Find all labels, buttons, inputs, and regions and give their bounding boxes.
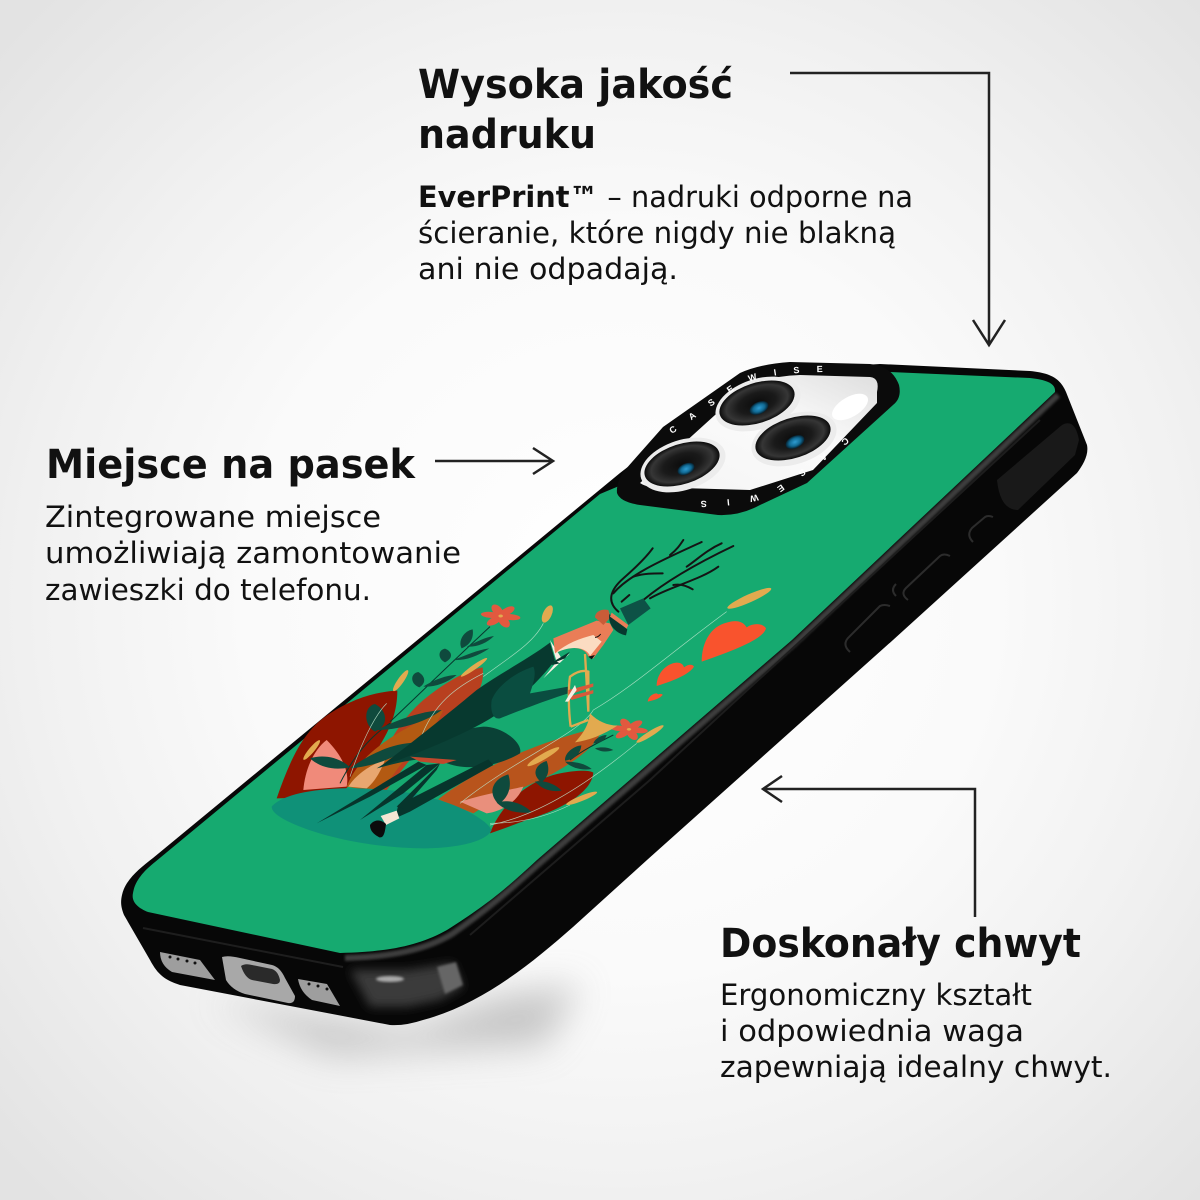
- side groove line: [470, 420, 1040, 935]
- ground ellipse: [272, 788, 492, 848]
- flower top: [475, 600, 526, 632]
- shirt collar: [543, 640, 570, 678]
- callout: grip: [720, 921, 1112, 1084]
- arrow: grip: [763, 776, 975, 917]
- body text: strap slot: [45, 500, 461, 607]
- green back surface: [133, 372, 1055, 953]
- body text: print quality: ścieranie, które nigdy nie blakną: [418, 216, 896, 250]
- wheat heads: [301, 585, 773, 807]
- bottom right speaker: [298, 979, 340, 1006]
- side edge highlight: [345, 395, 1058, 958]
- arrow: print quality: [790, 73, 1005, 345]
- right leaves: [438, 727, 603, 833]
- deer legs: [317, 759, 493, 823]
- body text: grip: [720, 978, 1112, 1084]
- heading: strap slot: Miejsce na pasek: [46, 442, 416, 488]
- body text: print quality: ani nie odpadają.: [418, 252, 678, 286]
- heading: print quality: Wysoka jakość: [418, 62, 733, 108]
- deer red undercoat: [410, 757, 457, 764]
- ring text bottom: CASEWISE: [701, 438, 848, 508]
- shoe and sock: [370, 811, 399, 837]
- ring text top: CASEWISE: [670, 366, 822, 433]
- trumpet: [568, 654, 617, 742]
- body text: strap slot: zawieszki do telefonu.: [45, 573, 371, 607]
- side buttons: [845, 516, 993, 652]
- callout: strap slot: [45, 442, 461, 607]
- hand cuff: [565, 685, 577, 702]
- wind lines: [350, 612, 727, 825]
- body text: grip: i odpowiednia waga: [720, 1014, 1024, 1048]
- hearts: [648, 621, 766, 702]
- phone case: [121, 362, 1088, 1026]
- heading: grip: Doskonały chwyt: [720, 921, 1081, 967]
- deer head: [553, 610, 613, 659]
- left red leaf: [277, 691, 397, 798]
- charging port: [222, 956, 295, 1003]
- side grip highlight: [997, 423, 1079, 510]
- body text: print quality: [418, 180, 913, 286]
- camera glass: [640, 375, 878, 490]
- left orange leaf: [347, 667, 483, 792]
- flash: [828, 388, 872, 426]
- body text: grip: Ergonomiczny kształt: [720, 978, 1032, 1012]
- callout: print quality: [418, 62, 913, 286]
- body text: grip: zapewniają idealny chwyt.: [720, 1050, 1112, 1084]
- deer jacket: [380, 643, 555, 767]
- arrow: strap slot: [435, 448, 553, 474]
- lens right: [744, 402, 844, 476]
- top hat: [609, 598, 651, 635]
- lens left: [633, 428, 733, 502]
- plant stems and leaves: [310, 627, 613, 813]
- bottom groove line: [143, 928, 343, 967]
- jacket sleeve: [491, 667, 568, 719]
- bow tie: [552, 652, 570, 665]
- deer trousers: [377, 727, 520, 768]
- illustration: deer with trumpet: [272, 540, 773, 848]
- case body: [121, 364, 1087, 1025]
- antlers: [611, 540, 733, 612]
- lens top: [708, 367, 808, 441]
- body text: print quality: EverPrint™ – nadruki odporne na: [418, 180, 913, 214]
- flower right: [605, 715, 653, 744]
- bottom left speaker: [160, 952, 215, 980]
- bottom corner highlight: [350, 962, 463, 1007]
- phone shadow: [210, 985, 580, 1055]
- body text: strap slot: Zintegrowane miejsce: [45, 500, 381, 534]
- heading: print quality: [418, 62, 733, 158]
- camera ring: [617, 362, 900, 515]
- camera island: [616, 362, 900, 516]
- body text: strap slot: umożliwiają zamontowanie: [45, 536, 461, 570]
- heading: print quality: nadruku: [418, 112, 596, 158]
